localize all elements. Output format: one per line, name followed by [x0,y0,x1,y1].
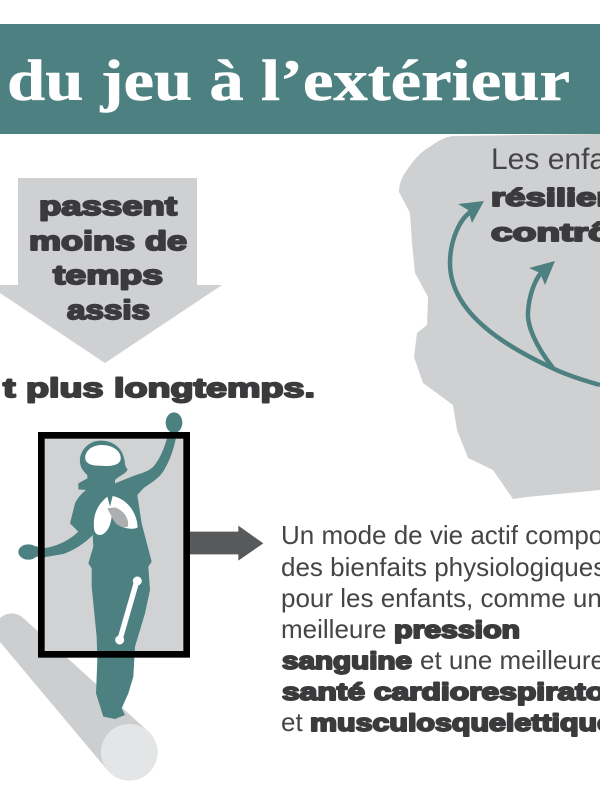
arrow: passent moins de temps assis: temps [53,260,163,290]
illustration: child on a log [0,412,263,781]
heart [107,507,128,527]
text: physiological benefits: santé cardiorespiratoire [282,679,600,706]
title banner: du jeu à l’extérieur [7,48,570,113]
frame [41,435,187,654]
arrow: small curved [528,261,555,368]
bone [115,577,142,644]
arrow: large curved [450,201,600,385]
frame background [41,435,187,654]
text: resilience [491,143,600,247]
brain [85,445,121,466]
text: physiological benefits: et [281,707,303,737]
panel: resilience blob [399,134,600,499]
text: physiological benefits [281,520,600,737]
text: physiological benefits: et une meilleure [420,645,600,675]
arrow: passent moins de temps assis: assis [67,295,150,325]
arrow: passent moins de temps assis: moins de [29,226,187,256]
arrow: passent moins de temps assis [0,178,222,363]
text: physiological benefits: meilleure [281,614,386,644]
log [0,613,158,781]
arrow: passent moins de temps assis: passent [39,191,177,221]
lungs [94,496,138,535]
title banner [0,24,600,134]
text: resilience: résilients [491,184,600,212]
text: physiological benefits: musculosquelettique [310,710,600,737]
arrow: dark [190,526,263,561]
text: physiological benefits: sanguine [282,648,412,675]
text: physiological benefits: pression [394,617,520,644]
text: plus longtemps: t plus longtemps. [3,373,315,403]
child silhouette [18,412,182,719]
text: physiological benefits: des bienfaits physiologiques [281,552,600,582]
